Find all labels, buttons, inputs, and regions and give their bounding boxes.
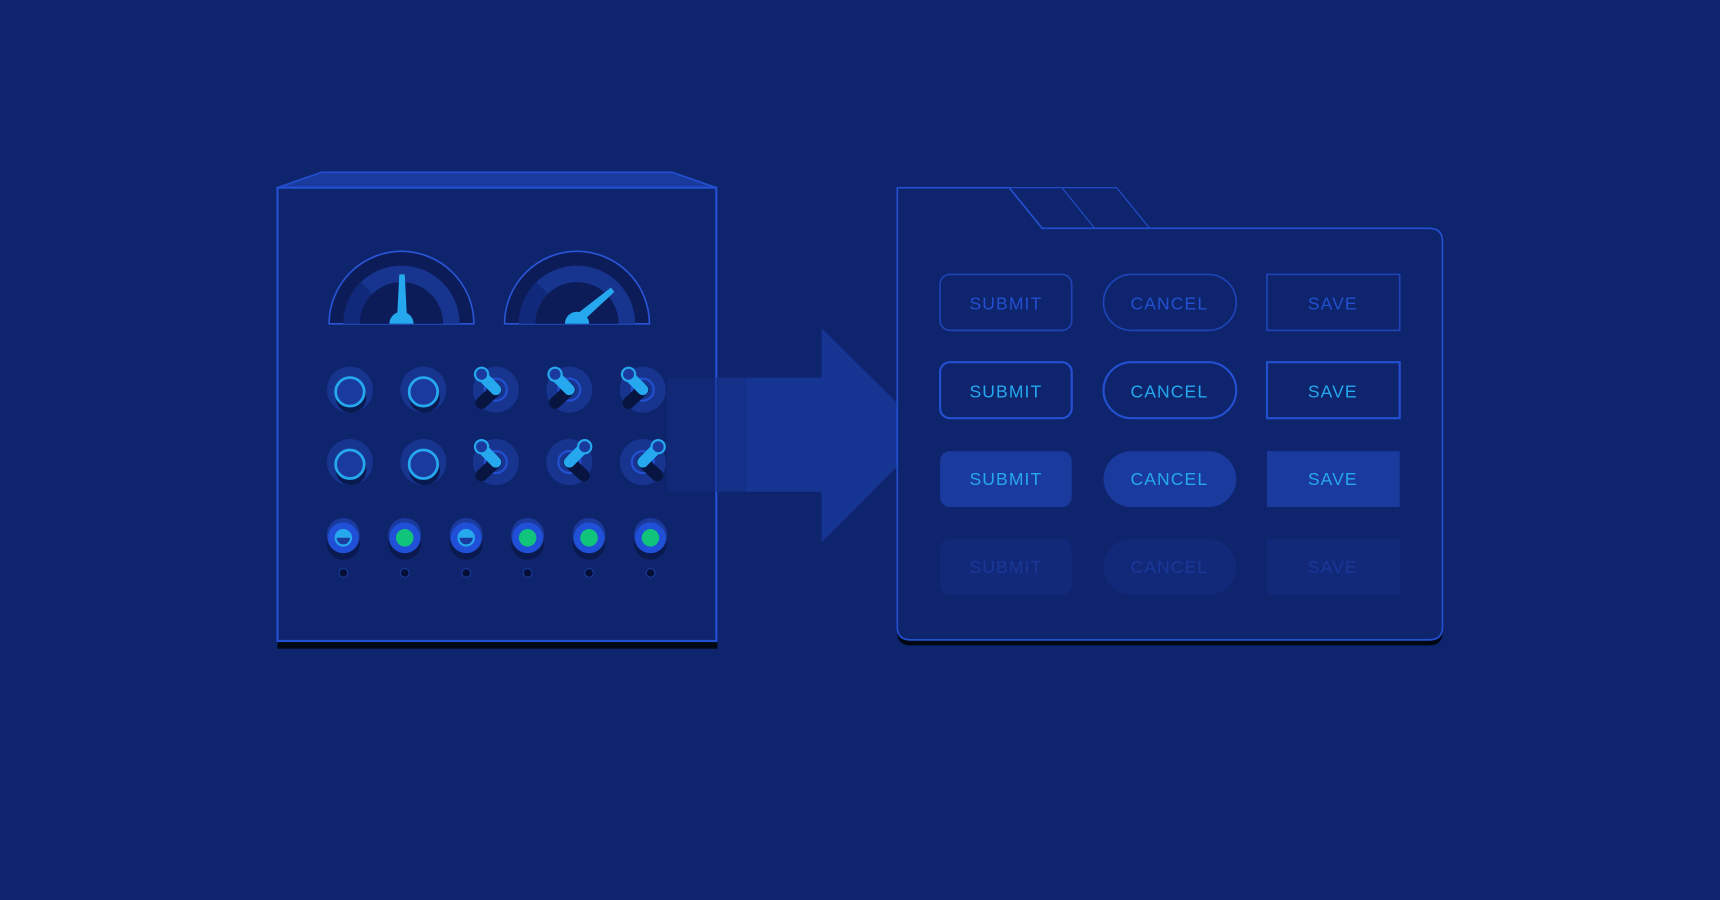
panel: button folder: CANCEL <box>1130 557 1208 577</box>
panel: button folder: CANCEL <box>1130 294 1208 314</box>
arrow <box>667 328 929 542</box>
panel: button folder: SAVE <box>1308 557 1358 577</box>
panel: button folder: SUBMIT <box>969 469 1042 489</box>
buttons row 4: disabled <box>940 539 1400 595</box>
panel: button folder: SAVE <box>1308 294 1358 314</box>
panel: button folder <box>897 188 1442 645</box>
panel: button folder: SUBMIT <box>969 381 1042 401</box>
icon: gauge right <box>505 251 649 324</box>
panel: button folder: SUBMIT <box>969 294 1042 314</box>
indicator lights <box>327 518 667 577</box>
knobs row 2 <box>327 439 666 485</box>
buttons row 1: outline faint <box>940 274 1400 330</box>
panel: button folder: SAVE <box>1308 381 1358 401</box>
knobs row 1 <box>327 367 666 413</box>
buttons row 3: filled <box>940 451 1400 507</box>
panel: button folder: CANCEL <box>1130 381 1208 401</box>
panel: button folder: SUBMIT <box>969 557 1042 577</box>
icon: gauge left <box>329 251 474 324</box>
panel: button folder: SAVE <box>1308 469 1358 489</box>
panel: button folder: CANCEL <box>1130 469 1208 489</box>
buttons row 2: outline <box>940 362 1400 418</box>
panel: control box <box>278 172 717 649</box>
